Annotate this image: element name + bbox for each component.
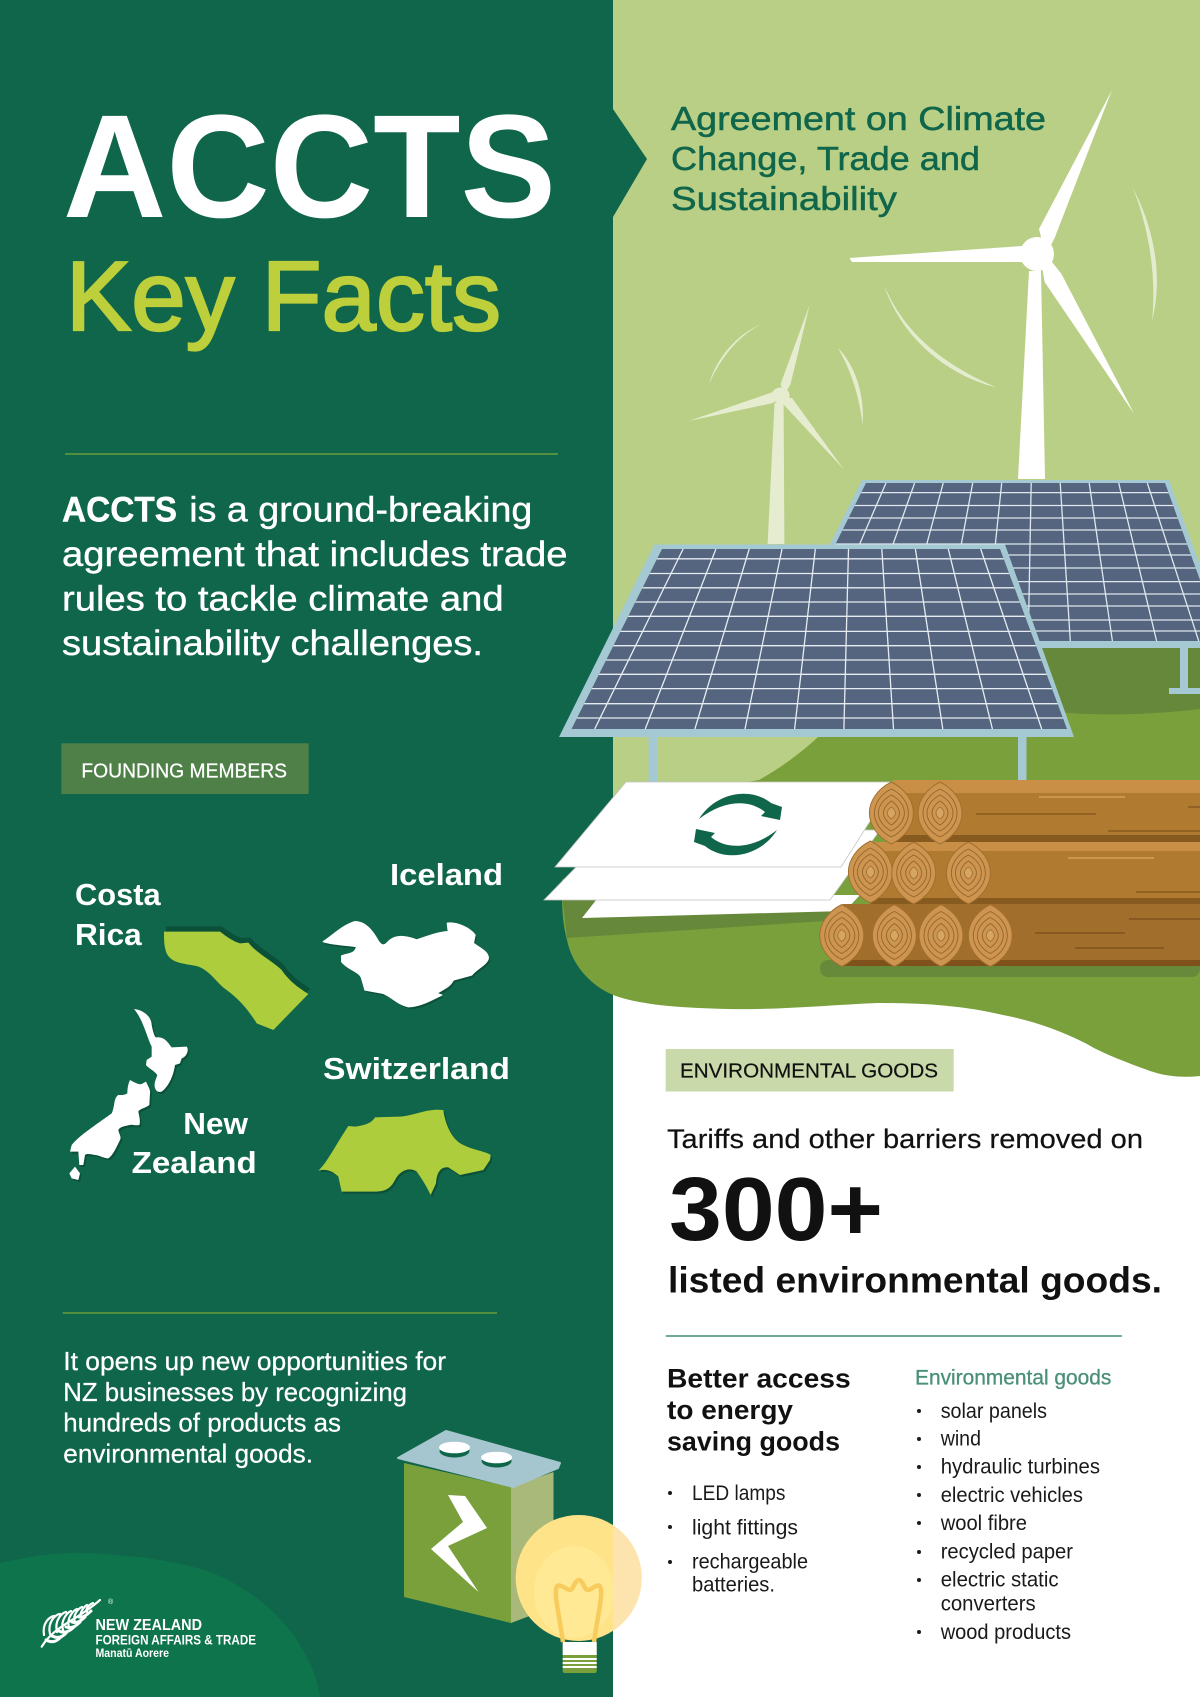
energy saving goods heading: saving goods <box>667 1426 840 1456</box>
environmental goods list heading: Environmental goods <box>915 1366 1111 1389</box>
large wind turbine <box>850 90 1157 479</box>
country labels: Iceland <box>390 857 503 892</box>
intro paragraph: rules to tackle climate and <box>62 580 504 619</box>
energy saving goods list <box>668 1482 808 1596</box>
logo: fern and wordmark: Manatū Aorere <box>96 1648 169 1660</box>
logo: fern and wordmark: ® <box>108 1598 114 1606</box>
environmental goods tag <box>666 1049 954 1092</box>
environmental goods list: electric static <box>941 1569 1059 1592</box>
icon: recycle arrows <box>694 794 782 855</box>
log shadow <box>820 960 1200 977</box>
solar panel: back <box>830 480 1200 694</box>
solar panel: front <box>559 544 1080 785</box>
map: New Zealand <box>69 1009 189 1182</box>
environmental goods list: recycled paper <box>941 1541 1073 1564</box>
arrow notch pointing to subtitle <box>613 109 647 217</box>
country labels: Switzerland <box>323 1051 510 1086</box>
intro paragraph: ACCTS <box>62 491 177 530</box>
headline stat: Tariffs and other barriers removed on <box>667 1124 1143 1154</box>
energy saving goods list: rechargeable <box>692 1551 808 1574</box>
logo: fern and wordmark <box>42 1598 256 1660</box>
intro paragraph: is a ground-breaking <box>189 491 532 530</box>
title: Key Facts <box>66 241 501 351</box>
environmental goods list: wood products <box>940 1621 1071 1644</box>
panel: white lower right background <box>613 0 1200 1697</box>
environmental goods list: wool fibre <box>940 1512 1027 1535</box>
subtitle: agreement name: Change, Trade and <box>671 140 980 177</box>
top log <box>869 780 1200 844</box>
environmental goods list: electric vehicles <box>941 1484 1083 1507</box>
ground hill <box>562 600 1200 1077</box>
logo backdrop <box>0 1553 320 1697</box>
panel: dark green left column <box>0 0 613 1697</box>
intro paragraph <box>62 491 568 663</box>
panel: light green sky <box>613 0 1200 992</box>
environmental goods list <box>917 1400 1100 1644</box>
energy saving goods list: light fittings <box>692 1516 798 1539</box>
intro paragraph: sustainability challenges. <box>62 624 483 663</box>
country labels: Rica <box>75 917 142 952</box>
country labels: New <box>183 1106 249 1141</box>
energy saving goods heading: Better access <box>667 1364 851 1394</box>
subtitle: agreement name: Sustainability <box>671 180 898 217</box>
middle log <box>848 841 1200 904</box>
stacked recycled paper <box>544 782 895 918</box>
map: Switzerland <box>318 1110 492 1197</box>
opportunities paragraph <box>63 1346 446 1468</box>
icon: light bulb <box>516 1515 642 1673</box>
headline stat <box>667 1124 1162 1301</box>
icon: battery <box>398 1431 560 1623</box>
environmental goods list: solar panels <box>941 1400 1047 1423</box>
map: Iceland <box>323 922 490 1009</box>
opportunities paragraph: It opens up new opportunities for <box>63 1346 446 1376</box>
environmental goods list: hydraulic turbines <box>941 1456 1100 1479</box>
intro paragraph: agreement that includes trade <box>62 535 568 574</box>
founding members tag <box>61 743 309 794</box>
title: ACCTS <box>63 85 556 249</box>
energy saving goods heading: to energy <box>667 1395 793 1425</box>
subtitle: agreement name <box>671 100 1046 217</box>
energy saving goods list: batteries. <box>692 1573 775 1596</box>
environmental goods list: converters <box>941 1593 1036 1616</box>
subtitle: agreement name: Agreement on Climate <box>671 100 1046 137</box>
country labels <box>75 857 510 1180</box>
logo: fern and wordmark: NEW ZEALAND <box>96 1617 202 1634</box>
bottom log <box>820 904 1200 966</box>
icon: silver fern <box>42 1600 100 1647</box>
founding members tag: FOUNDING MEMBERS <box>81 759 287 782</box>
country labels: Costa <box>75 877 161 912</box>
logo: fern and wordmark: FOREIGN AFFAIRS & TRADE <box>96 1633 256 1648</box>
headline stat: 300+ <box>669 1160 883 1260</box>
map: Costa Rica <box>164 926 310 1030</box>
title <box>63 85 556 351</box>
environmental goods tag: ENVIRONMENTAL GOODS <box>680 1060 938 1082</box>
country labels: Zealand <box>132 1145 257 1180</box>
opportunities paragraph: NZ businesses by recognizing <box>63 1377 407 1407</box>
headline stat: listed environmental goods. <box>668 1260 1162 1301</box>
environmental goods list: wind <box>940 1428 981 1450</box>
opportunities paragraph: environmental goods. <box>63 1438 313 1468</box>
opportunities paragraph: hundreds of products as <box>63 1408 341 1438</box>
energy saving goods heading <box>667 1364 851 1456</box>
small wind turbine <box>689 305 863 544</box>
energy saving goods list: LED lamps <box>692 1482 785 1505</box>
log pile <box>820 780 1200 977</box>
